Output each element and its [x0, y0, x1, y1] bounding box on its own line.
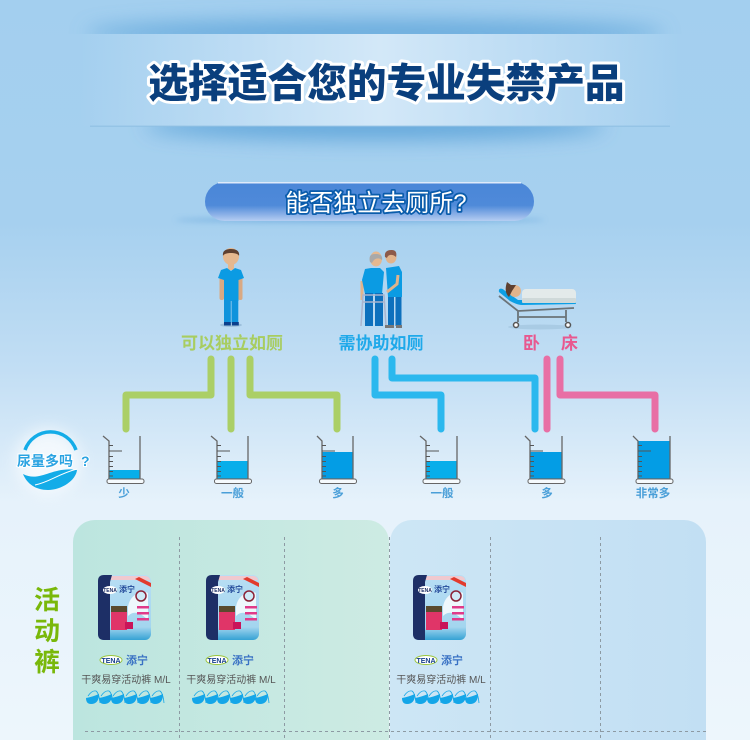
product pack: TENA: [103, 588, 117, 594]
label: 多: 多: [332, 486, 344, 500]
icon: patient on hospital bed: [499, 282, 576, 330]
heading: pull-up pants: 活: [34, 585, 60, 615]
label: bedridden: [523, 333, 578, 353]
product 3: [396, 575, 486, 704]
logo text: ?: [81, 453, 90, 469]
arrows: pink connectors: [547, 359, 655, 429]
panel: blue column group: [390, 520, 706, 740]
label: 一般: 一般: [221, 486, 244, 500]
label: 一般: 一般: [430, 486, 454, 500]
beaker: very high: [633, 436, 673, 484]
label: 多: 多: [541, 486, 553, 500]
brand logo: TENA: [416, 658, 436, 665]
label: bedridden: 卧: [523, 334, 540, 353]
beaker: high: [525, 436, 565, 484]
panel: green column group: [73, 520, 389, 740]
heading: pull-up pants: [34, 585, 60, 677]
question text: 能否独立去厕所?: [285, 190, 467, 217]
brand logo: TENA: [101, 658, 121, 665]
product name: 干爽易穿活动裤 M/L: [396, 673, 486, 686]
product 1: [81, 575, 171, 704]
question pill: [175, 182, 545, 222]
product pack: [413, 575, 466, 640]
beaker: low: [103, 436, 144, 484]
title: 选择适合您的专业失禁产品: [148, 62, 625, 106]
label: needs assistance: 需协助如厕: [338, 334, 424, 353]
logo text: 尿量多吗: [17, 453, 73, 469]
label: bedridden: 床: [561, 333, 578, 353]
product name: 干爽易穿活动裤 M/L: [186, 673, 276, 686]
arrows: green connectors: [126, 359, 337, 429]
product 2: [186, 575, 276, 704]
brand logo: [206, 653, 254, 667]
product pack: 添宁: [119, 584, 135, 594]
label: independent: 可以独立如厕: [181, 333, 283, 353]
absorbency drops: [86, 691, 164, 704]
product pack: [98, 575, 151, 640]
product pack: 添宁: [434, 584, 450, 594]
icon: standing person: [218, 248, 244, 327]
brand logo: TENA: [207, 658, 227, 665]
heading: pull-up pants: 裤: [34, 647, 60, 677]
brand logo: [415, 653, 463, 667]
icon: nurse helping elderly person with walker: [360, 250, 402, 328]
product pack: TENA: [211, 588, 225, 594]
label: 少: 少: [118, 487, 130, 500]
arrows: blue connectors: [375, 359, 535, 429]
icon: urine volume logo: [16, 429, 90, 493]
brand logo: 添宁: [232, 653, 254, 667]
label: 非常多: 非常多: [636, 486, 670, 500]
brand logo: 添宁: [441, 653, 463, 667]
product name: 干爽易穿活动裤 M/L: [81, 673, 171, 686]
absorbency drops: [402, 691, 479, 704]
beaker: moderate: [211, 436, 252, 484]
product pack: TENA: [418, 588, 432, 594]
title banner: [80, 34, 680, 127]
beaker: moderate: [420, 436, 460, 484]
heading: pull-up pants: 动: [34, 616, 60, 646]
product pack: [206, 575, 259, 640]
brand logo: 添宁: [126, 653, 148, 667]
absorbency drops: [192, 691, 269, 704]
product pack: 添宁: [227, 584, 243, 594]
brand logo: [100, 653, 148, 667]
beaker: high: [317, 436, 356, 484]
